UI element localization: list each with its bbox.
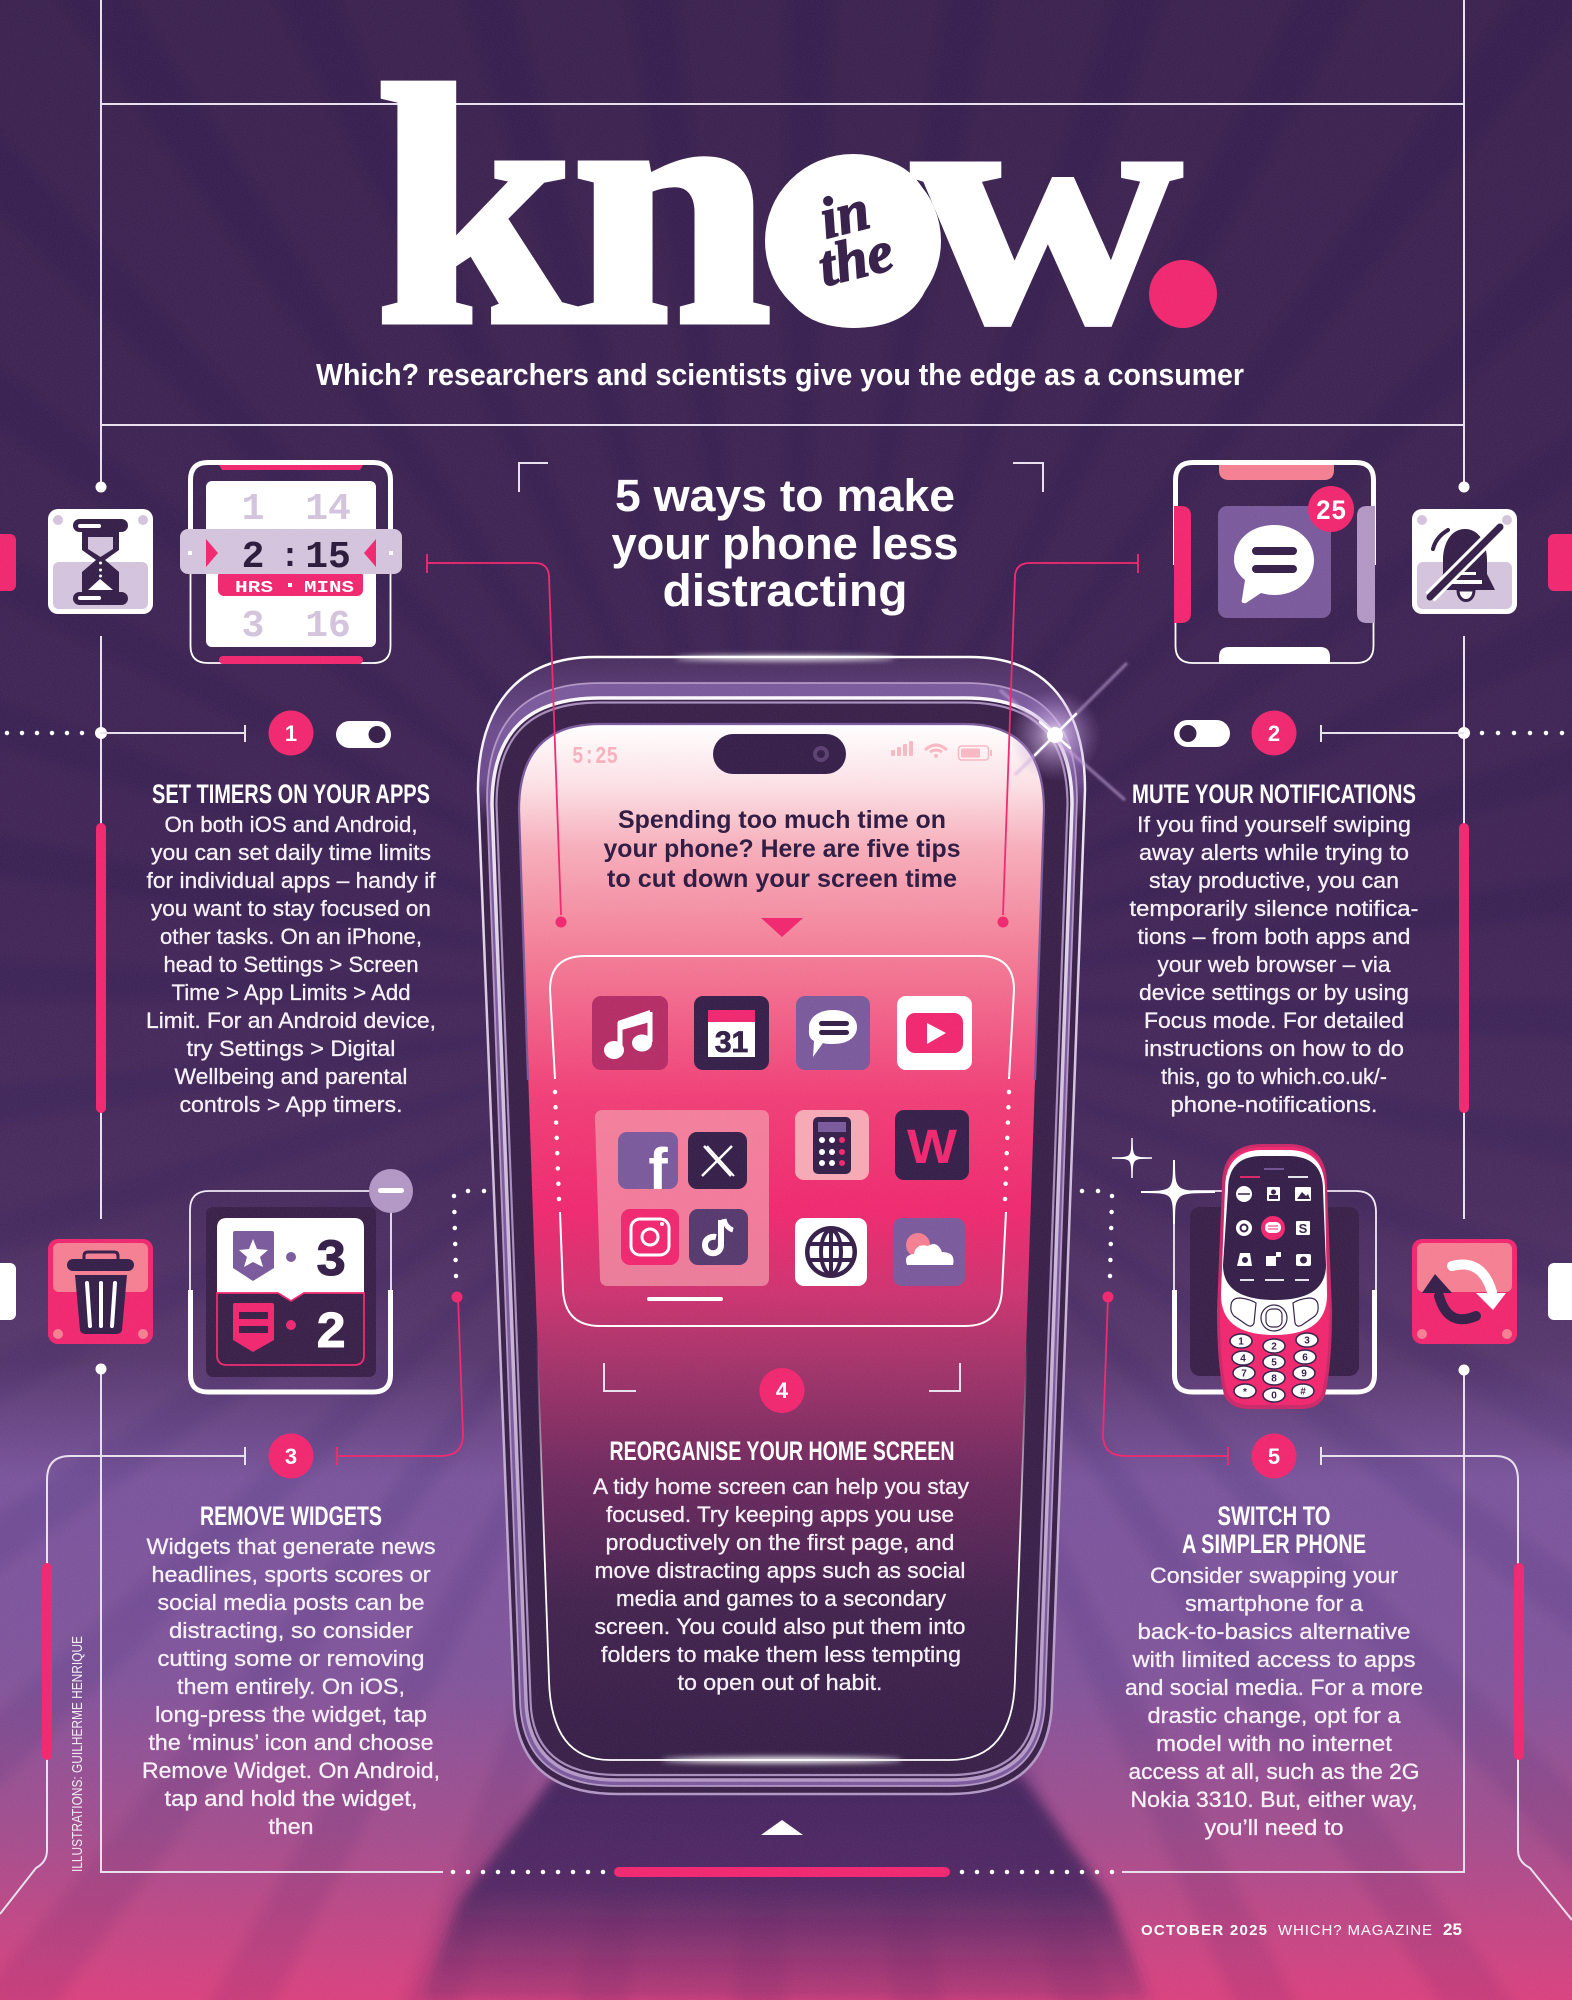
body 3: Remove Widget. On Android, [142,1758,440,1783]
badge 2: 2 [1268,721,1280,746]
footer: 25 [1443,1920,1462,1939]
body 5: with limited access to apps [1131,1647,1416,1672]
body 2 [1130,812,1418,1117]
nokia keypad [1230,1333,1318,1402]
section 2 connectors [1321,482,1572,742]
body 5: you’ll need to [1204,1815,1344,1840]
nokia screen icons [1236,1186,1311,1266]
body 2: stay productive, you can [1149,868,1399,893]
pink triangle [761,918,803,937]
body 2: instructions on how to do [1144,1036,1404,1061]
app: calculator [795,1110,869,1180]
facebook: f [648,1137,668,1202]
nokia nav keys [1231,1298,1318,1331]
body 1: for individual apps – handy if [146,868,436,893]
phone body [492,698,1072,1780]
nokia phone: 6 [1302,1352,1308,1364]
white triangle [761,1820,803,1835]
footer: WHICH? MAGAZINE [1278,1922,1432,1939]
widget: timer: 2 [242,536,264,579]
heading: 5 ways [519,463,1043,616]
body 1: Time > App Limits > Add [172,980,410,1005]
nokia phone [1217,1144,1332,1409]
badge 1 [268,710,314,756]
badge 4: 4 [776,1378,789,1403]
body 5: model with no internet [1156,1731,1392,1756]
pink side bars [42,823,1524,1877]
footer: OCTOBER 2025 [1141,1922,1267,1939]
instagram [621,1209,679,1265]
connector 5 [1082,1191,1321,1465]
heading 3: REMOVE WIDGETS [200,1501,382,1531]
body 2: this, go to which.co.uk/- [1161,1064,1387,1089]
body 4: to open out of habit. [678,1670,882,1695]
widget: score: 2 [315,1304,347,1363]
body 2: Focus mode. For detailed [1144,1008,1404,1033]
title dot [1149,260,1217,328]
widget: timer: 3 [242,605,264,648]
pink connectors to phone [427,554,1138,928]
phone purple band [487,683,1077,1786]
widget: timer: 16 [305,605,351,648]
background radial rays [0,200,1572,1800]
body 2: temporarily silence notifica- [1130,896,1418,921]
body 5: drastic change, opt for a [1148,1703,1401,1728]
app: calendar [694,996,769,1070]
body 4: productively on the first page, and [606,1530,954,1555]
tiktok [689,1209,748,1265]
body 5: access at all, such as the 2G [1128,1759,1420,1784]
white ellipse of the O [765,154,941,328]
widget: timer: 15 [305,536,351,579]
phone [478,656,1127,1794]
widget frame: phone [1174,1191,1376,1392]
nokia phone: 8 [1271,1374,1277,1384]
nokia phone: * [1243,1387,1247,1398]
nokia phone: 9 [1301,1368,1307,1380]
facebook [618,1132,678,1202]
body 2: away alerts while trying to [1139,840,1409,865]
body 3: tap and hold the widget, [164,1786,418,1811]
phone glass back [478,657,1085,1794]
body 3: headlines, sports scores or [152,1562,430,1587]
body 4: media and games to a secondary [616,1586,946,1611]
icon: refresh [1412,1239,1517,1344]
badge 1: 1 [285,721,297,746]
body 1: you can set daily time limits [151,840,431,865]
body 3 [142,1534,440,1839]
badge 3: 3 [285,1444,297,1469]
body 5: smartphone for a [1185,1591,1364,1616]
badge 3 [268,1434,314,1478]
title [376,18,1217,395]
body 1: you want to stay focused on [151,896,431,921]
body 1: Limit. For an Android device, [146,1008,436,1033]
app: messages [796,996,870,1070]
subtitle: Which? researchers and scientists give you the edge as a consumer [316,357,1244,392]
body 1: On both iOS and Android, [164,812,418,837]
body 3: cutting some or removing [158,1646,424,1671]
body 1: Wellbeing and parental [174,1064,408,1089]
heading: 5 ways: your phone less [612,518,958,569]
body 3: Widgets that generate news [146,1534,436,1559]
nokia screen icons: S [1299,1221,1308,1236]
body 5: Consider swapping your [1150,1563,1398,1588]
app: Which W: W [907,1121,958,1174]
intro text: to cut down your screen time [607,865,957,893]
body 4: focused. Try keeping apps you use [606,1502,954,1527]
body 1: other tasks. On an iPhone, [160,924,422,949]
body 4 [593,1474,969,1695]
heading 5: SWITCH TO [1218,1501,1330,1531]
body 4: folders to make them less tempting [601,1642,961,1667]
nokia phone: 4 [1240,1354,1246,1364]
section 3 node [96,1364,106,1374]
body 2: tions – from both apps and [1138,924,1410,949]
body 3: distracting, so consider [169,1618,413,1643]
widget: timer: MINS [304,579,354,598]
heading 2: MUTE YOUR NOTIFICATIONS [1132,779,1416,809]
badge 5 [1252,1434,1296,1478]
status time: 5:25 [572,744,618,771]
section 4 [593,1363,969,1695]
connector 3 [245,1191,486,1465]
minus badge [369,1169,413,1213]
section 5 node [1458,1364,1470,1376]
app: Which W [895,1110,969,1180]
app: weather [893,1218,965,1286]
nokia phone: 1 [1238,1336,1244,1348]
side tabs [0,534,1572,1320]
nokia phone: # [1300,1386,1306,1398]
body 4: move distracting apps such as social [594,1558,966,1583]
x [688,1132,747,1189]
app: calendar: 31 [715,1026,748,1059]
widget: timer: 14 [305,488,351,531]
title: kno [376,18,944,395]
body 2: your web browser – via [1158,952,1391,977]
badge 25 [1308,486,1354,532]
body 2: phone-notifications. [1170,1092,1378,1117]
body 3: the ‘minus’ icon and choose [148,1730,434,1755]
heading: 5 ways: 5 ways to make [615,470,955,521]
nokia phone: 0 [1271,1390,1277,1402]
illustration credit: ILLUSTRATIONS: GUILHERME HENRIQUE [69,1636,86,1872]
phone shadow [420,1775,1150,2000]
body 5: back-to-basics alternative [1138,1619,1410,1644]
body 1: head to Settings > Screen [164,952,418,977]
outer curved lines [0,1456,1572,1920]
toggle 1 [336,721,391,748]
body 5: and social media. For a more [1125,1675,1423,1700]
in the [801,173,899,299]
intro text: your phone? Here are five tips [604,835,960,863]
title: w [912,19,1182,395]
widget: chat [1174,462,1375,664]
phone screen [519,724,1044,1760]
in the: in [813,176,876,251]
body 1: controls > App timers. [180,1092,402,1117]
body 2: device settings or by using [1139,980,1409,1005]
footer [1141,1920,1462,1939]
body 4: A tidy home screen can help you stay [593,1474,969,1499]
body 4: screen. You could also put them into [594,1614,966,1639]
screen lower outline [537,1340,1027,1760]
app folder [595,1110,769,1301]
intro text: Spending too much time on [618,806,946,834]
toggle 2 [1174,720,1230,747]
badge 25: 25 [1316,497,1346,528]
body 5 [1125,1563,1423,1840]
nokia phone: 5 [1271,1358,1277,1368]
heading 5: A SIMPLER PHONE [1182,1529,1366,1559]
app: video [897,996,972,1070]
body 3: long-press the widget, tap [155,1702,427,1727]
status icons [891,741,992,760]
widget: timer: : [280,539,300,577]
glare sparkle [1000,663,1127,800]
body 3: social media posts can be [158,1590,424,1615]
widget: timer: 1 [242,488,264,531]
body 1: try Settings > Digital [186,1036,396,1061]
widget: score: 3 [315,1232,347,1291]
body 3: then [268,1814,314,1839]
heading 1: SET TIMERS ON YOUR APPS [152,779,430,809]
in the: the [812,218,899,299]
widget: timer [180,462,402,664]
body 1 [146,812,436,1117]
folder bar [647,1297,723,1301]
widget: timer: HRS [235,579,273,598]
section 1 connectors [7,482,245,742]
intro text [604,806,960,893]
badge 2 [1252,710,1296,756]
heading 5 [1182,1501,1366,1559]
badge 5: 5 [1268,1444,1280,1469]
badge 4 [760,1368,804,1413]
nokia phone: 3 [1304,1336,1310,1346]
icon: trash [48,1239,153,1344]
heading 4: REORGANISE YOUR HOME SCREEN [610,1436,954,1466]
body 3: them entirely. On iOS, [177,1674,405,1699]
app: music [592,996,668,1070]
home screen outline [550,956,1014,1326]
dynamic island [713,734,846,774]
body 2: If you find yourself swiping [1137,812,1411,837]
widget: score [190,1169,413,1392]
icon: hourglass [48,509,153,614]
nokia phone: 7 [1241,1368,1247,1380]
icon: muted bell [1412,509,1517,614]
nokia phone: 2 [1271,1342,1277,1352]
sparkles [1112,1138,1215,1224]
body 5: Nokia 3310. But, either way, [1130,1787,1418,1812]
app: browser [795,1218,867,1286]
heading: 5 ways: distracting [662,565,908,616]
